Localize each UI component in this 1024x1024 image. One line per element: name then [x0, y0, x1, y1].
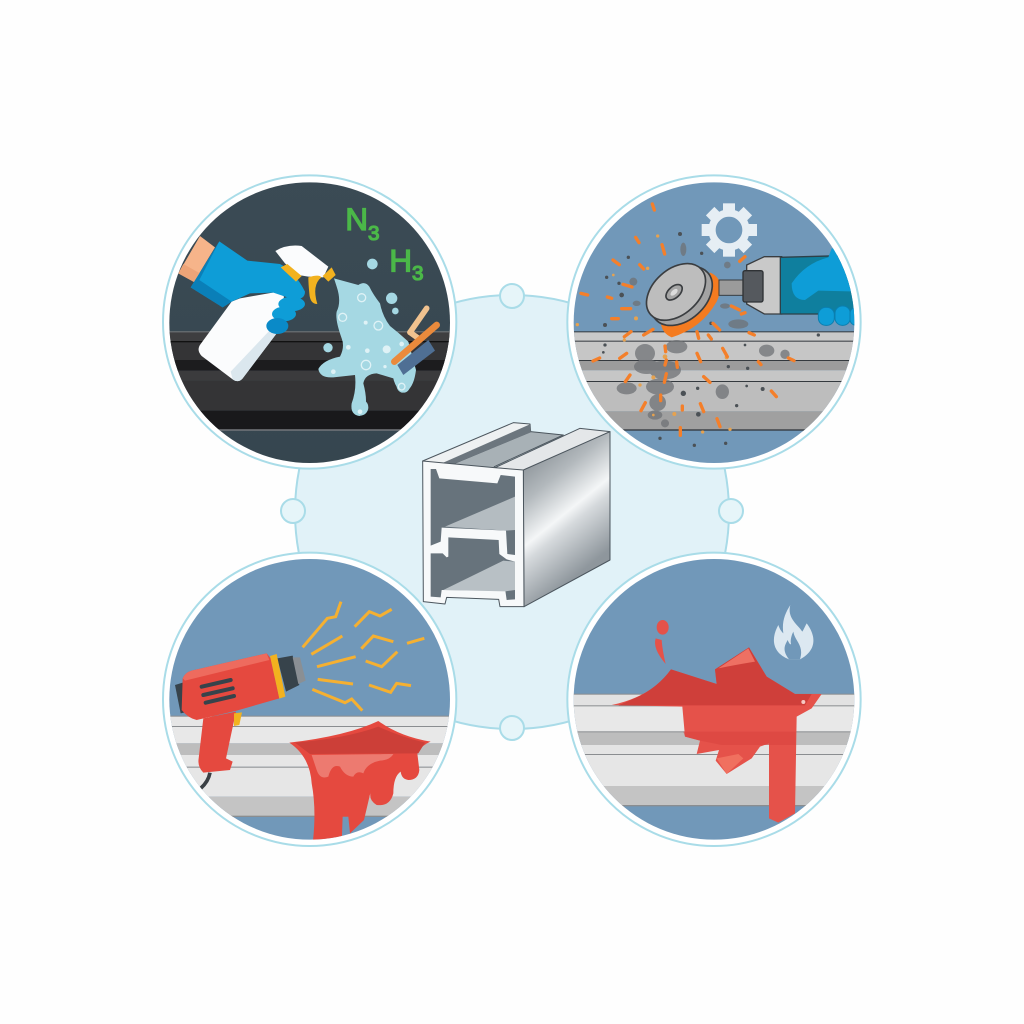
icon: cuff [178, 236, 215, 282]
grey rail [565, 331, 865, 431]
top faces [423, 423, 531, 468]
light rail [565, 694, 865, 806]
label: N3: 3 [368, 222, 379, 245]
panel: abrasive grinding [565, 170, 865, 470]
icon: flame [774, 605, 813, 659]
dark rail [160, 331, 460, 431]
heat waves [303, 602, 424, 711]
icon: scrub brush [394, 308, 437, 375]
panel: paint spread [565, 550, 865, 850]
upper cavity [431, 469, 515, 555]
orange sparks [581, 204, 794, 435]
icon: red paint splat [612, 620, 822, 823]
light rail [160, 716, 460, 817]
side face [523, 432, 610, 607]
icon: spray bottle [199, 292, 284, 381]
aluminium extrusion profile [423, 423, 610, 607]
icon: paint drip [289, 721, 431, 843]
debris blotches [617, 243, 790, 427]
icon: wire brush wheel [646, 262, 719, 338]
label: H3: H [389, 243, 412, 278]
icon: foam splash [318, 259, 416, 416]
icon: heat gun [175, 653, 306, 788]
front face [423, 461, 524, 607]
icon: grinder [719, 248, 865, 325]
icon: gear [702, 203, 757, 257]
icon: spray head [275, 246, 336, 304]
label: N3: N [345, 202, 368, 237]
panel: heat gun [160, 550, 460, 850]
connector nodes [281, 284, 743, 740]
central backing disk [295, 295, 729, 729]
lower cavity [431, 537, 515, 600]
icon: blue glove [191, 241, 305, 334]
panel: chemical cleaning [160, 170, 460, 470]
label: H3: 3 [412, 262, 423, 285]
